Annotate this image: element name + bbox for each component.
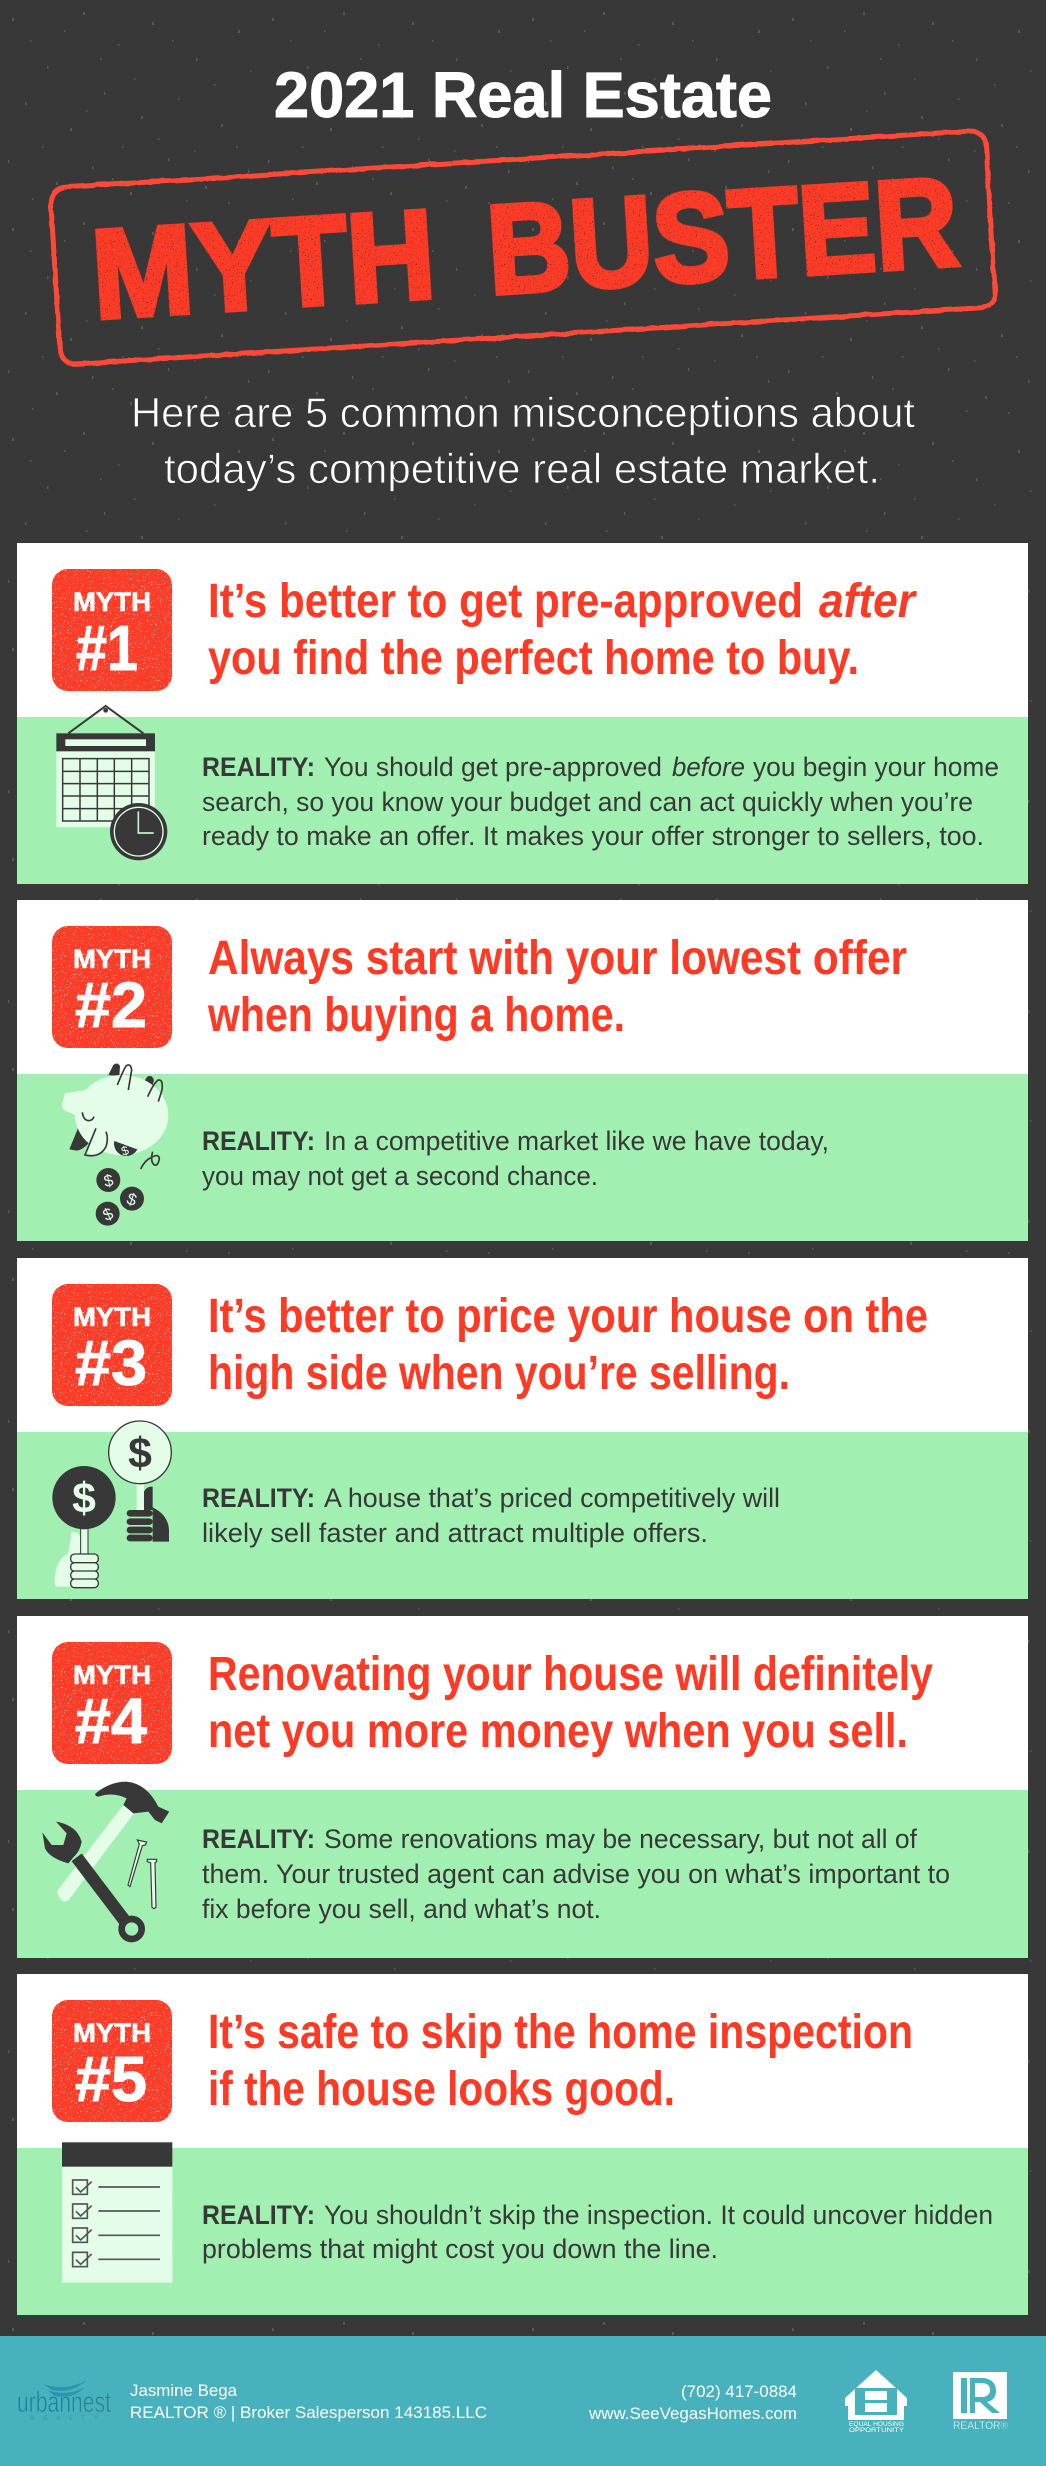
urban nest realty logo: urbannest	[17, 2386, 111, 2419]
icon: piggy bank dropping coins: $	[102, 1171, 115, 1191]
myth 4 headline: net you more money when you sell.	[208, 1705, 908, 1758]
myth 1 badge	[52, 569, 172, 691]
myth 5 reality text: problems that might cost you down the line.	[202, 2234, 718, 2264]
footer	[0, 2336, 1046, 2466]
icon: equal housing opportunity: EQUAL HOUSING	[849, 2421, 904, 2428]
myth 4 reality text: Some renovations may be necessary, but not all of	[324, 1824, 917, 1854]
myth 2 headline: when buying a home.	[207, 989, 625, 1042]
panel: myth 4	[17, 1616, 1028, 1958]
myth 5 reality text: You shouldn’t skip the inspection. It could uncover hidden	[324, 2200, 993, 2230]
stamp border	[50, 130, 996, 365]
icon: hands holding dollar signs: $	[72, 1475, 96, 1523]
icon: inspection checklist	[62, 2142, 172, 2283]
myth 1 reality text: you begin your home	[753, 752, 999, 782]
myth 3 headline: high side when you’re selling.	[208, 1347, 790, 1400]
icon: hammer, wrench and nails	[42, 1782, 169, 1939]
myth 3 headline: It’s better to price your house on the	[208, 1290, 928, 1343]
agent name and title: REALTOR ® | Broker Salesperson 143185.LLC	[130, 2404, 487, 2422]
myth 2 badge: MYTH	[73, 944, 151, 974]
myth 4 badge: MYTH	[73, 1660, 151, 1690]
urban nest realty logo	[17, 2380, 111, 2422]
myth 4 badge: #4	[75, 1685, 147, 1757]
myth 5 badge: MYTH	[73, 2018, 151, 2048]
icon: piggy bank dropping coins: $	[100, 1204, 116, 1225]
myth 3 badge: MYTH	[73, 1302, 151, 1332]
myth 1 reality text: before	[672, 752, 745, 782]
icon: realtor logo: REALTOR®	[953, 2420, 1008, 2432]
myth 4 reality text: them. Your trusted agent can advise you on what’s important to	[202, 1859, 950, 1889]
myth 2 headline: Always start with your lowest offer	[208, 932, 907, 985]
myth 2 badge	[52, 926, 172, 1048]
myth 5 headline: It’s safe to skip the home inspection	[208, 2006, 913, 2059]
myth 3 reality text: A house that’s priced competitively will	[324, 1483, 780, 1513]
panel: myth 5	[17, 1974, 1028, 2315]
icon: piggy bank dropping coins: $	[124, 1189, 139, 1210]
urban nest realty logo: REALTY	[30, 2416, 98, 2422]
myth 1 headline: It’s better to get pre-approved	[208, 575, 803, 628]
myth 3 badge: #3	[75, 1327, 147, 1399]
myth 1 headline: after	[819, 575, 917, 628]
stamp heading: myth buster: BUSTER	[483, 151, 962, 321]
myth 4 headline: Renovating your house will definitely	[208, 1648, 933, 1701]
stamp heading: myth buster: MYTH	[88, 183, 439, 345]
myth 1 badge: #1	[76, 612, 138, 684]
icon: realtor logo	[953, 2372, 1008, 2432]
myth 5 badge: #5	[75, 2043, 147, 2115]
myth 2 reality text: In a competitive market like we have today,	[324, 1126, 829, 1156]
myth 3 reality text: REALITY:	[202, 1483, 315, 1513]
icon: equal housing opportunity	[845, 2370, 907, 2434]
myth 1 reality text: search, so you know your budget and can act quickly when you’re	[202, 787, 973, 817]
myth 3 badge	[52, 1284, 172, 1406]
myth 2 reality text: REALITY:	[202, 1126, 315, 1156]
agent contact details: (702) 417-0884	[681, 2383, 797, 2401]
agent name and title: Jasmine Bega	[130, 2382, 238, 2400]
myth 4 reality text: REALITY:	[202, 1824, 315, 1854]
icon: piggy bank dropping coins	[62, 1064, 168, 1226]
agent contact details: www.SeeVegasHomes.com	[588, 2405, 797, 2423]
myth 2 reality text: you may not get a second chance.	[202, 1161, 598, 1191]
subtitle: Here are 5 common misconceptions about	[131, 389, 915, 436]
icon: hands holding dollar signs: $	[128, 1429, 152, 1477]
panel: myth 2	[17, 900, 1028, 1241]
myth 4 badge	[52, 1642, 172, 1764]
myth 5 badge	[52, 2000, 172, 2122]
myth 3 reality text: likely sell faster and attract multiple offers.	[202, 1518, 708, 1548]
myth 4 reality text: fix before you sell, and what’s not.	[202, 1894, 601, 1924]
header	[50, 59, 996, 492]
myth 1 badge: MYTH	[73, 587, 151, 617]
panel: myth 3	[17, 1258, 1028, 1599]
myth 1 reality text: REALITY:	[202, 752, 315, 782]
title: 2021 Real Estate	[274, 59, 772, 131]
subtitle: today’s competitive real estate market.	[164, 445, 880, 492]
icon: equal housing opportunity: OPPORTUNITY	[849, 2427, 905, 2434]
myth 2 badge: #2	[75, 969, 147, 1041]
myth 5 reality text: REALITY:	[202, 2200, 315, 2230]
myth 1 headline: you find the perfect home to buy.	[208, 632, 859, 685]
panel: myth 1	[17, 543, 1028, 884]
icon: hands holding dollar signs	[52, 1421, 171, 1588]
icon: calendar with clock	[56, 706, 167, 860]
myth 1 reality text: ready to make an offer. It makes your offer stronger to sellers, too.	[202, 821, 984, 851]
myth 5 headline: if the house looks good.	[208, 2063, 675, 2116]
icon: piggy bank dropping coins: $	[119, 1143, 131, 1159]
myth 1 reality text: You should get pre-approved	[324, 752, 662, 782]
